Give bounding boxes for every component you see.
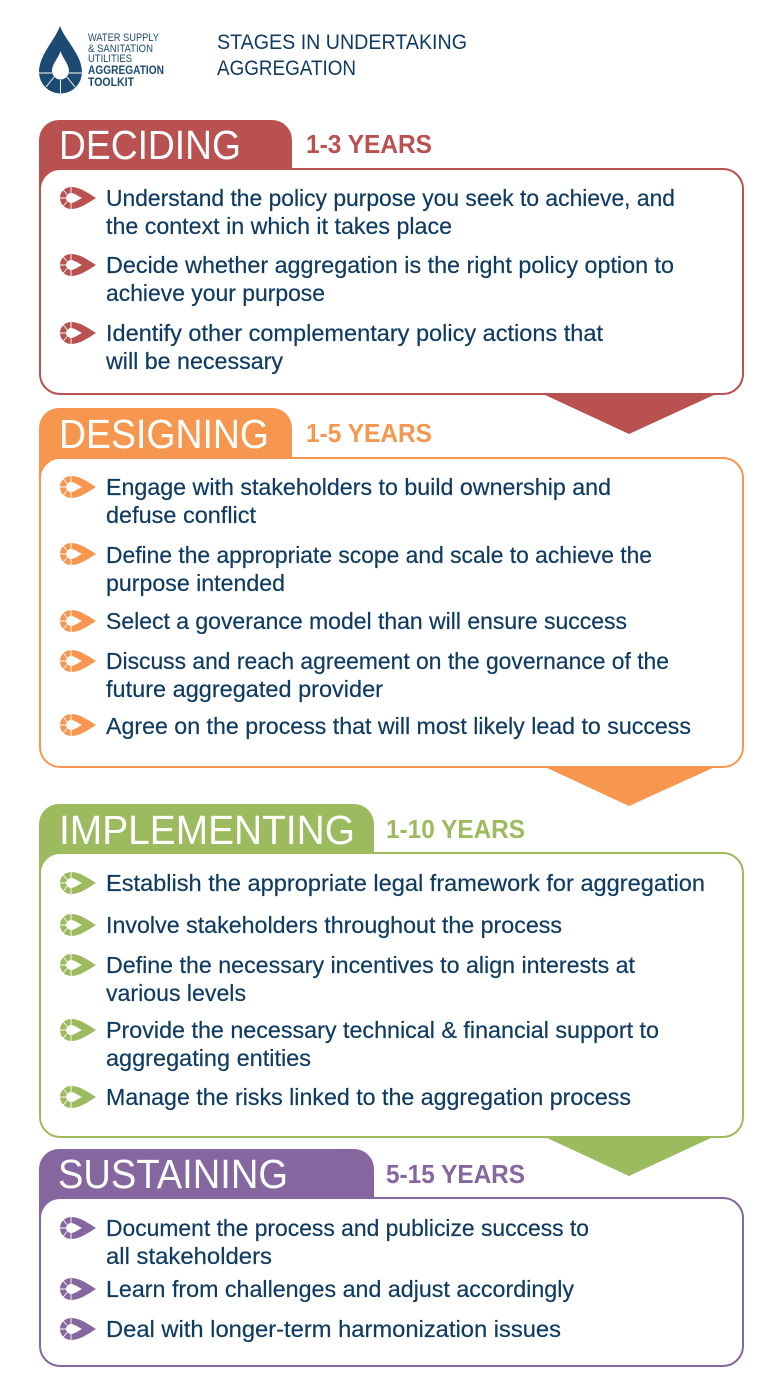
logo text <box>88 32 164 89</box>
logo text: UTILITIES <box>88 53 132 65</box>
sustaining duration: 5-15 YEARS <box>386 1159 525 1189</box>
implementing bullets: Establish the appropriate legal framework for aggregation <box>106 870 705 896</box>
designing bullets: Define the appropriate scope and scale to achieve the <box>106 542 652 568</box>
designing bullets: purpose intended <box>106 570 285 596</box>
designing bullets: Agree on the process that will most likely lead to success <box>106 713 691 739</box>
implementing content box <box>40 853 743 1137</box>
deciding arrow fill over border <box>543 393 716 395</box>
implementing arrow fill over border <box>545 1136 713 1138</box>
logo text: TOOLKIT <box>88 77 134 89</box>
implementing bullets: aggregating entities <box>106 1045 311 1071</box>
designing heading: DESIGNING <box>59 411 269 457</box>
designing heading tab <box>39 408 292 484</box>
logo text: & SANITATION <box>88 43 153 55</box>
deciding bullets <box>60 185 675 374</box>
implementing bullets <box>60 870 705 1110</box>
panel: implementing <box>39 804 743 1176</box>
designing arrow fill over border <box>545 766 715 768</box>
sustaining bullets: Document the process and publicize success to <box>106 1215 589 1241</box>
designing bullets <box>60 474 691 739</box>
deciding arrow <box>543 394 716 434</box>
deciding bullets: achieve your purpose <box>106 280 325 306</box>
implementing bullets: Involve stakeholders throughout the process <box>106 912 562 938</box>
designing duration: 1-5 YEARS <box>306 418 432 448</box>
implementing bullets: Manage the risks linked to the aggregation process <box>106 1084 631 1110</box>
panel: sustaining <box>39 1149 743 1366</box>
deciding heading: DECIDING <box>59 122 241 168</box>
deciding bullets: Identify other complementary policy actions that <box>106 320 604 346</box>
implementing bullets: various levels <box>106 980 246 1006</box>
deciding content box <box>40 169 743 394</box>
logo text: AGGREGATION <box>88 65 164 77</box>
logo text: WATER SUPPLY <box>88 32 160 44</box>
sustaining bullets <box>60 1215 589 1342</box>
implementing bullets: Define the necessary incentives to align interests at <box>106 952 636 978</box>
title: AGGREGATION <box>217 57 356 80</box>
panel: designing <box>39 408 743 806</box>
deciding bullets: Decide whether aggregation is the right policy option to <box>106 252 674 278</box>
implementing duration: 1-10 YEARS <box>386 814 525 844</box>
title: STAGES IN UNDERTAKING <box>217 31 467 54</box>
designing bullets: Discuss and reach agreement on the governance of the <box>106 648 669 674</box>
designing bullets: Select a goverance model than will ensure success <box>106 608 627 634</box>
sustaining heading tab <box>39 1149 374 1224</box>
designing arrow <box>545 767 715 806</box>
designing bullets: defuse conflict <box>106 502 257 528</box>
deciding heading tab <box>39 120 292 195</box>
implementing arrow <box>545 1137 713 1176</box>
implementing heading: IMPLEMENTING <box>59 807 355 853</box>
sustaining bullets: Deal with longer-term harmonization issues <box>106 1316 561 1342</box>
logo: water drop <box>39 26 82 93</box>
deciding bullets: Understand the policy purpose you seek to achieve, and <box>106 185 675 211</box>
sustaining bullets: Learn from challenges and adjust accordingly <box>106 1276 574 1302</box>
implementing bullets: Provide the necessary technical & financial support to <box>106 1017 659 1043</box>
implementing heading tab <box>39 804 374 880</box>
deciding bullets: the context in which it takes place <box>106 213 452 239</box>
title <box>217 31 467 80</box>
sustaining content box <box>40 1198 743 1366</box>
designing bullets: Engage with stakeholders to build ownership and <box>106 474 611 500</box>
designing content box <box>40 458 743 767</box>
designing bullets: future aggregated provider <box>106 676 383 702</box>
sustaining bullets: all stakeholders <box>106 1243 272 1269</box>
deciding bullets: will be necessary <box>105 348 283 374</box>
deciding duration: 1-3 YEARS <box>306 129 432 159</box>
sustaining heading: SUSTAINING <box>58 1151 288 1197</box>
panel: deciding <box>39 120 743 434</box>
